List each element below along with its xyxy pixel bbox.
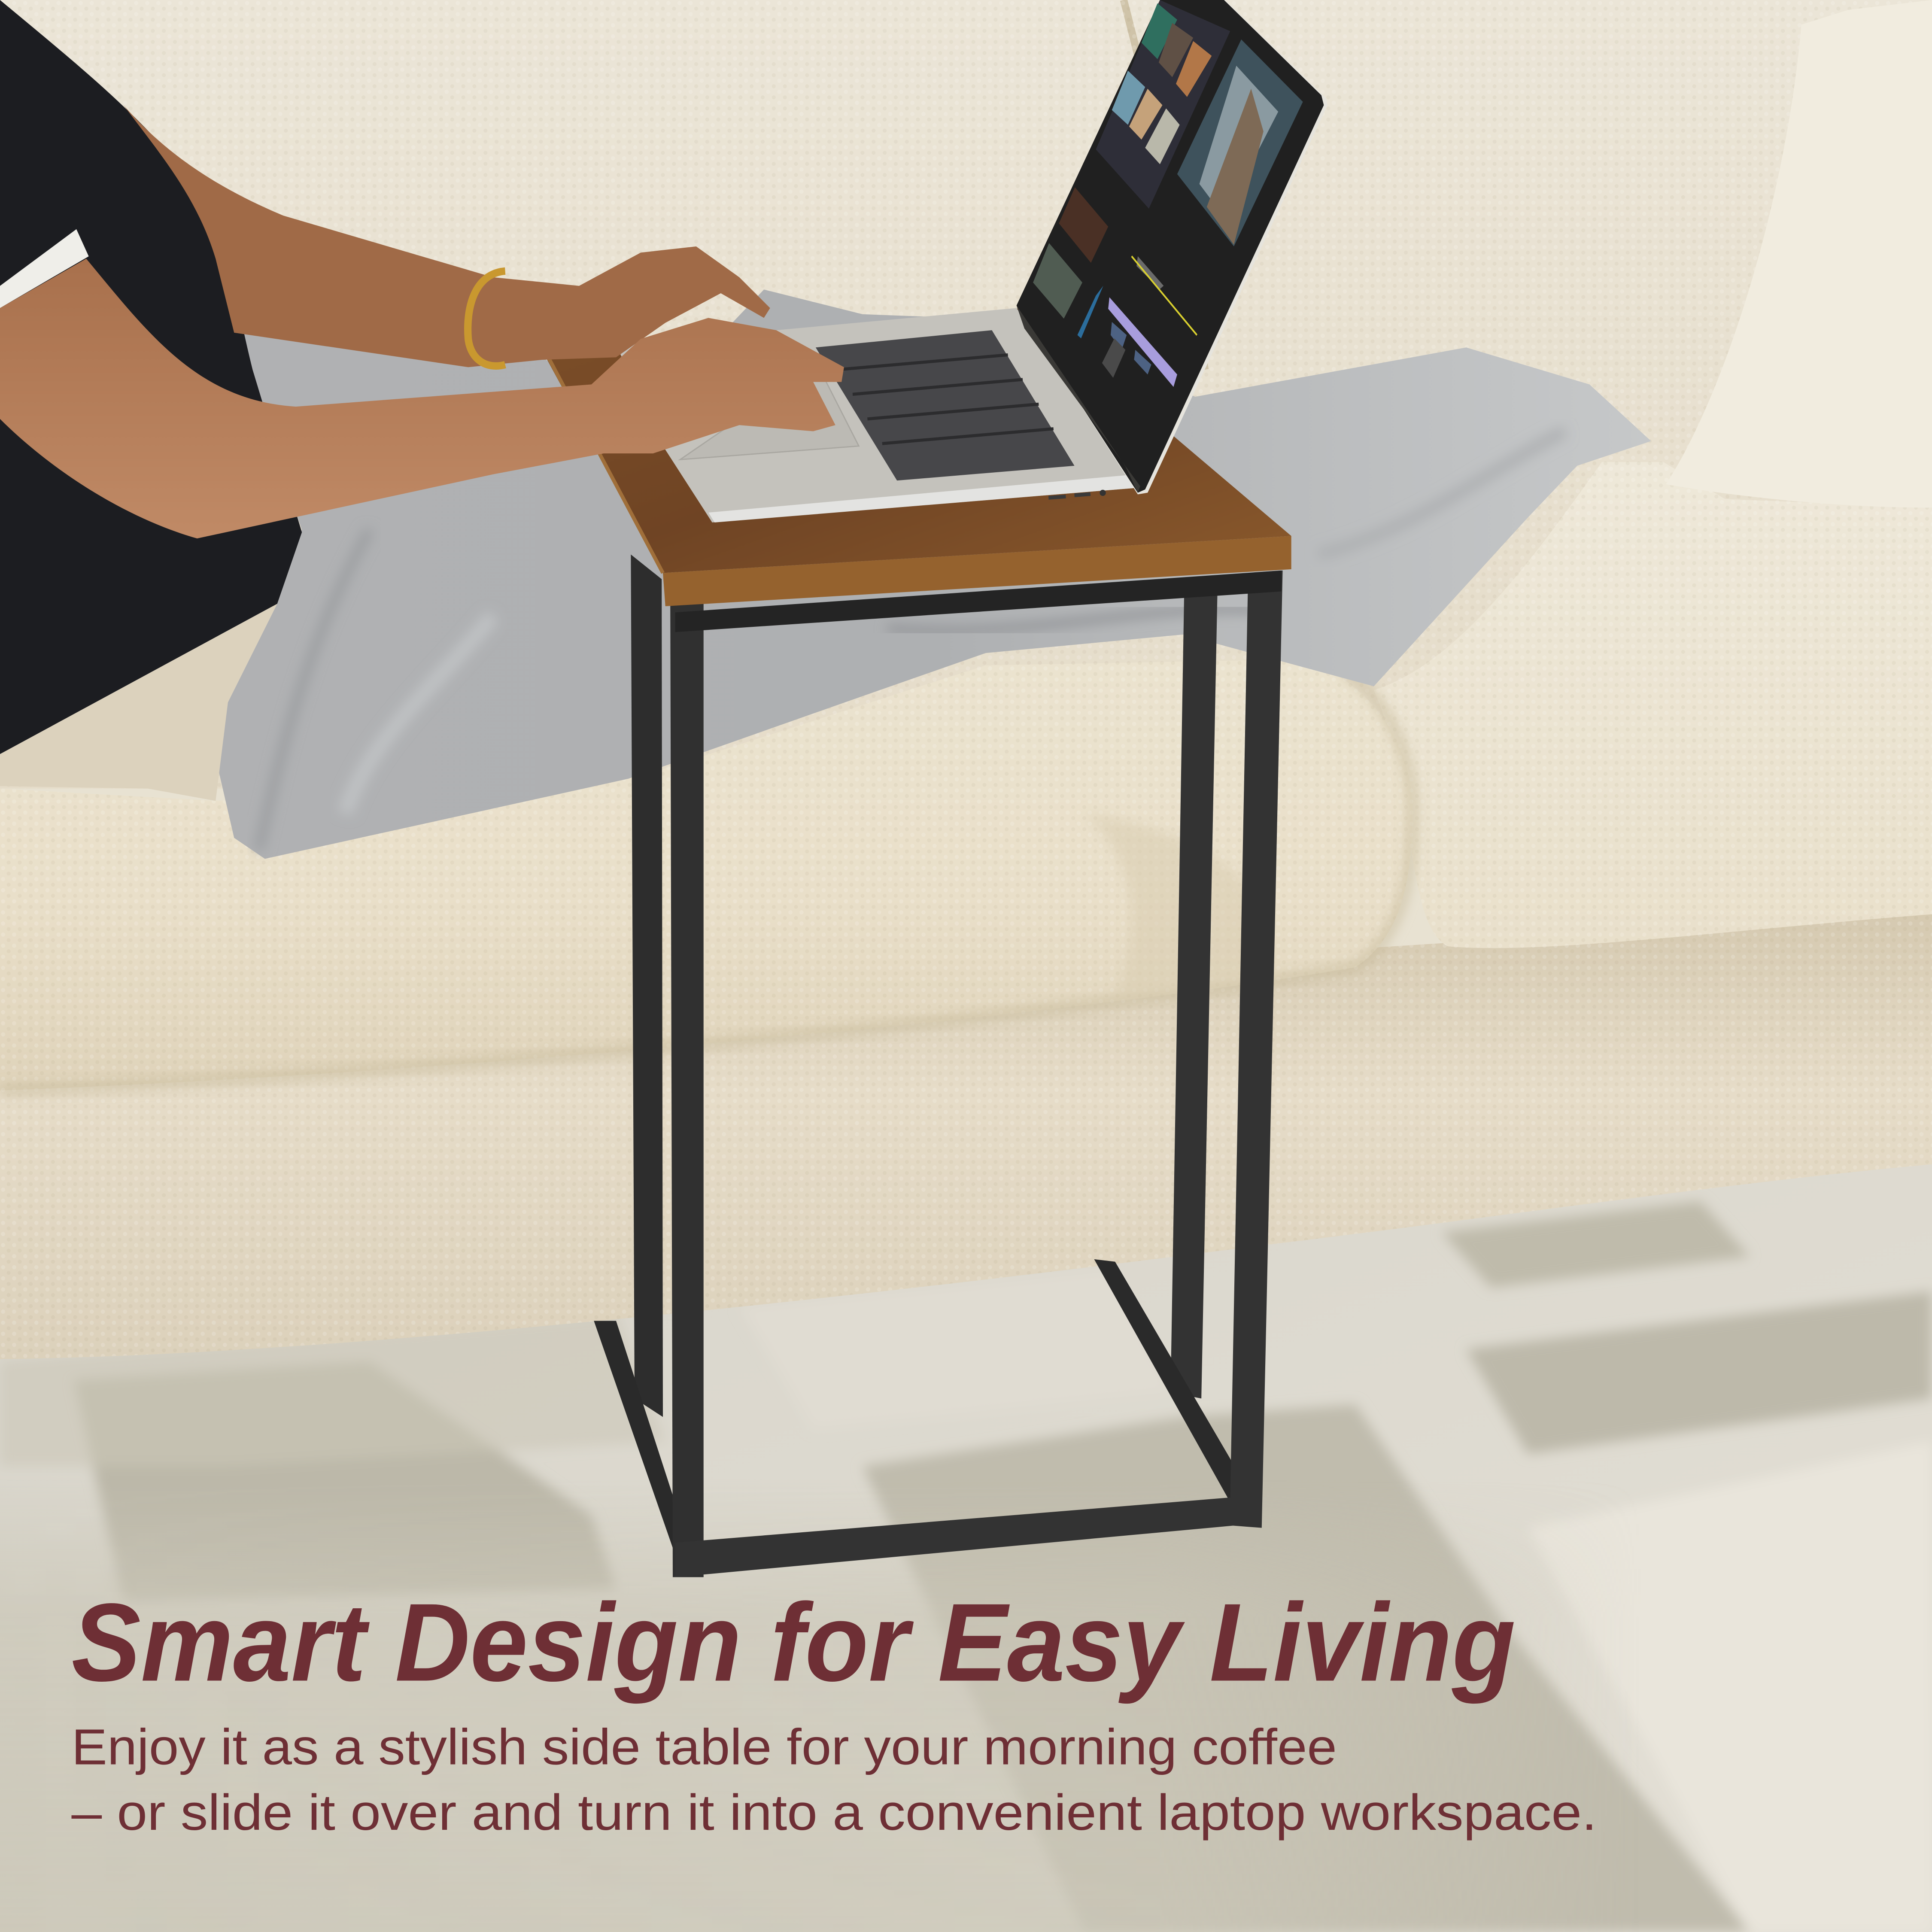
rear table legs and frame: [594, 554, 1235, 1555]
lower arm and hand: [0, 259, 844, 538]
bottom wash behind text: [0, 1479, 1932, 1932]
black t-shirt: [0, 0, 302, 754]
sofa back cushions: [0, 0, 1932, 789]
trackpad: [680, 376, 859, 459]
display: [1017, 0, 1324, 493]
beige trousers: [0, 604, 277, 801]
sleeve trim: [0, 229, 89, 308]
laptop base: [616, 308, 1136, 522]
subtitle line 2: – or slide it over and turn it into a convenient laptop workspace.: [71, 1784, 1597, 1841]
gallery thumbnails: [1112, 3, 1212, 164]
gold bracelet: [468, 271, 505, 366]
throw pillow: [1666, 0, 1932, 507]
upper arm: [123, 105, 770, 367]
sofa base front: [0, 912, 1932, 1359]
right seat cushion: [1374, 462, 1932, 948]
gallery panel: [1096, 0, 1230, 209]
left seat cushion: [0, 659, 1413, 1091]
table top: [546, 308, 1291, 606]
subtitle line 1: Enjoy it as a stylish side table for your morning coffee: [71, 1719, 1337, 1775]
keyboard: [816, 330, 1075, 480]
bezel strip: [1017, 306, 1140, 493]
screen: [1017, 0, 1327, 494]
rug: [0, 1158, 1932, 1932]
lid outline: [1017, 0, 1327, 494]
playhead: [1132, 256, 1197, 335]
laptop: [616, 0, 1327, 522]
preview image: [1177, 39, 1303, 246]
table front legs and rails: [670, 571, 1283, 1577]
timeline clips: [1077, 256, 1177, 387]
ports: [1048, 494, 1091, 498]
heading: Smart Design for Easy Living: [71, 1580, 1516, 1705]
person: [0, 0, 844, 801]
grey blanket: [216, 289, 1651, 859]
lower left thumbnails: [1033, 187, 1108, 319]
